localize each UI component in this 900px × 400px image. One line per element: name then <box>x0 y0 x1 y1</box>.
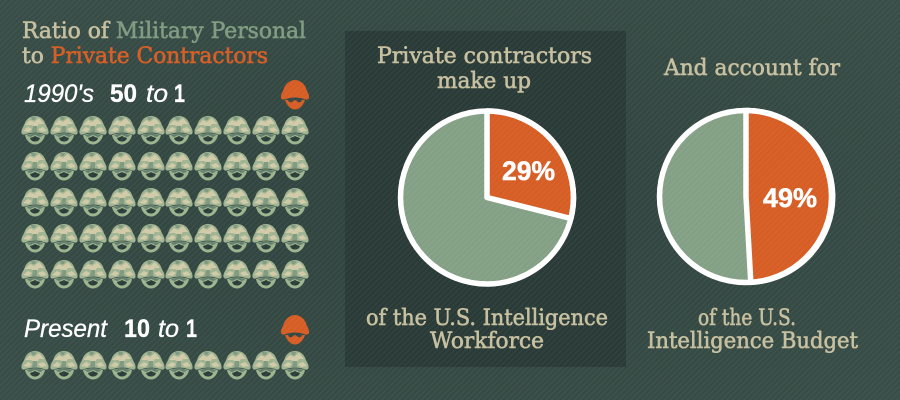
ratio label: Present 10 to 1 <box>24 315 197 343</box>
caption: workforce: Workforce <box>430 329 544 354</box>
ratio label: Present 10 to 1: to <box>158 315 179 343</box>
ratio label: 1990's 50 to 1: 1 <box>174 80 185 108</box>
pie chart: 29% of workforce <box>400 111 574 284</box>
ratio label: 1990's 50 to 1 <box>24 80 185 108</box>
ratio label: 1990's 50 to 1: to <box>146 80 168 108</box>
pie chart: 49% of budget <box>660 110 833 283</box>
caption: workforce: of the U.S. Intelligence <box>366 306 608 331</box>
ratio label: 1990's 50 to 1: 1990's <box>24 80 94 108</box>
caption: workforce <box>366 306 608 354</box>
title <box>22 19 306 69</box>
caption: budget <box>647 306 858 354</box>
heading: private contractors make up: Private contractors <box>377 44 592 69</box>
heading: private contractors make up: make up <box>437 69 531 94</box>
ratio label: Present 10 to 1: Present <box>24 315 108 343</box>
icon row: 10 military helmets <box>21 351 309 380</box>
icon: contractor helmet 1990s <box>281 80 309 110</box>
ratio label: Present 10 to 1: 10 <box>124 315 150 343</box>
title: Ratio of Military Personal <box>22 19 306 44</box>
value: 29%: 29% <box>502 156 555 186</box>
caption: budget: of the U.S. <box>698 306 796 331</box>
title: to Private Contractors <box>22 44 268 69</box>
caption: budget: Intelligence Budget <box>647 329 858 354</box>
heading: and account for: And account for <box>663 56 840 81</box>
ratio label: Present 10 to 1: 1 <box>186 315 197 343</box>
heading: private contractors make up <box>377 44 592 94</box>
ratio label: 1990's 50 to 1: 50 <box>110 80 137 108</box>
value: 49%: 49% <box>763 183 817 213</box>
panel: workforce <box>345 31 626 367</box>
icon: contractor helmet present <box>281 315 309 344</box>
icon grid: 50 military helmets <box>21 116 309 288</box>
